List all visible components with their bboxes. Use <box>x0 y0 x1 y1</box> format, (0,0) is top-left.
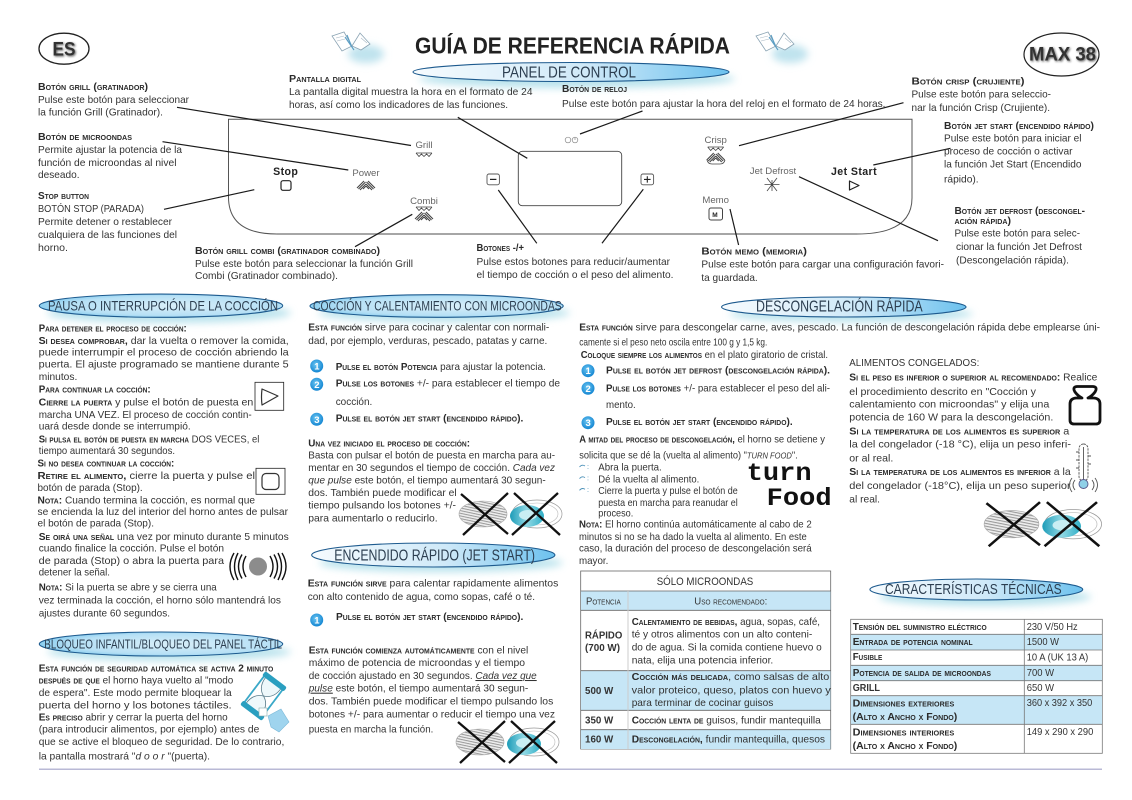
row: entrada: 1500 W <box>1027 637 1059 648</box>
text: pausa y continuación: cuando finalice la cocción. Pulse el botón <box>39 544 224 555</box>
row: fusible: Fusible <box>853 652 883 663</box>
text: función automática <box>308 645 555 736</box>
step 2 <box>582 382 830 411</box>
model badge: MAX 38 <box>1024 33 1099 76</box>
text: pausa y continuación: minutos. <box>39 372 77 383</box>
row: dimensiones exteriores: (Alto x Ancho x Fondo) <box>853 712 957 723</box>
button: Power <box>352 168 380 190</box>
heading: encendido: ENCENDIDO RÁPIDO (JET START) <box>334 546 535 565</box>
table: sólo microondas <box>581 571 832 749</box>
heading: bloqueo: BLOQUEO INFANTIL/BLOQUEO DEL PANEL TÁCTIL <box>44 636 282 652</box>
text: función automática: botones +/- para aumentar o reducir el tiempo una vez <box>309 709 555 720</box>
row: dimensiones interiores <box>853 727 1093 752</box>
step 2: 2 <box>314 380 319 391</box>
text: alimentos congelados: Si la temperatura de los alimentos es superior a <box>849 426 1070 437</box>
row: 160 W: 160 W <box>585 734 613 745</box>
row: 350 W: Cocción lenta de guisos, fundir mantequilla <box>632 715 821 726</box>
callout: pantalla digital <box>289 74 533 111</box>
text: pausa y continuación: puerta. El ajuste programado se mantiene durante 5 <box>39 360 289 371</box>
icon: weight <box>1070 386 1100 424</box>
text: pausa y continuación: Para continuar la cocción: <box>39 384 151 395</box>
text: pausa y continuación: Si pulsa el botón de puesta en marcha DOS VECES, el <box>39 434 259 445</box>
text: alimentos congelados <box>849 358 1098 506</box>
callout: botón de microondas: Botón de microondas <box>38 132 132 143</box>
step 2: Pulse los botones +/- para establecer el tiempo de <box>336 379 560 390</box>
button: Combi <box>410 196 438 221</box>
text: pausa y continuación: Cierre la puerta y pulse el botón de puesta en <box>39 398 254 409</box>
callout: botones -/+: Pulse estos botones para reducir/aumentar <box>476 257 671 268</box>
heading: características técnicas: CARACTERÍSTICAS TÉCNICAS <box>885 581 1062 598</box>
table: características técnicas <box>851 619 1102 753</box>
text: función automática: pulse este botón, el tiempo aumentará 30 segun- <box>308 684 528 695</box>
button: Memo: Memo <box>702 195 729 206</box>
button: Crisp <box>705 135 727 164</box>
text: una vez iniciado: para aumentarlo o reducirlo. <box>308 514 438 525</box>
heading: pausa: PAUSA O INTERRUPCIÓN DE LA COCCIÓN <box>48 298 278 314</box>
step 1: 1 <box>314 616 320 626</box>
row: entrada <box>853 637 1059 648</box>
panel: descongelación rápida <box>579 297 1102 567</box>
heading: bloqueo <box>39 632 291 661</box>
text: una vez iniciado: que pulse este botón, el tiempo aumentará 30 segun- <box>308 475 546 486</box>
text: una vez iniciado: Basta con pulsar el botón de puesta en marcha para au- <box>308 450 555 461</box>
row: dimensiones exteriores: Dimensiones exteriores <box>853 699 955 710</box>
button: Grill: Grill <box>415 140 433 151</box>
text: pausa y continuación: marcha UNA VEZ. El proceso de cocción contin- <box>39 410 252 421</box>
callout: botón de reloj: Botón de reloj <box>562 84 627 95</box>
text: pasos: Abra la puerta. <box>598 463 662 474</box>
callout: stop button <box>38 191 177 254</box>
row: grill: GRILL <box>853 683 881 694</box>
model badge: MAX 38: MAX 38 <box>1029 44 1096 66</box>
text: pausa y continuación: botón de parada (Stop). <box>38 483 143 494</box>
text: alimentos congelados: del congelador (-18°C), elija un peso superior <box>849 481 1071 492</box>
callout: botones -/+: Botones -/+ <box>476 243 524 254</box>
row: 500 W: 500 W <box>585 686 613 697</box>
button: Jet Defrost: Jet Defrost <box>750 166 797 177</box>
text: pausa y continuación: Para detener el proceso de cocción: <box>39 323 187 334</box>
text: pausa y continuación <box>38 323 289 619</box>
display text: turn food <box>747 459 832 513</box>
text: nota: minutos si no se ha dado la vuelta al alimento. En este <box>579 532 807 543</box>
table header: Potencia <box>586 596 621 607</box>
icon: open book right <box>756 32 808 63</box>
text: bloqueo: de espera". Este modo permite bloquear la <box>39 688 232 699</box>
button: Stop <box>273 166 298 190</box>
callout: botón de reloj <box>562 84 886 110</box>
text: alimentos congelados: la del congelador (-18 °C), elija un peso inferi- <box>849 440 1071 451</box>
callout: botón memo: ta guardada. <box>701 273 758 284</box>
button: Stop: Stop <box>273 166 298 178</box>
button: Memo: M <box>712 212 718 219</box>
button: Grill <box>415 140 433 156</box>
table header <box>586 596 767 607</box>
row: tensión <box>853 622 1078 633</box>
text: pausa y continuación: vez terminada la cocción, el horno sólo mantendrá los <box>39 596 281 607</box>
icon: bullets <box>580 465 588 492</box>
row: 500 W <box>585 672 832 709</box>
row: 500 W: valor proteico, queso, platos con huevo y <box>632 685 832 696</box>
row: rápido: do de agua. Si la comida contiene huevo o <box>632 643 822 654</box>
callout: botón crisp <box>912 77 1051 114</box>
callout: botón grill combi <box>195 246 413 282</box>
text: intro descongelación <box>579 323 1100 361</box>
digital display <box>518 151 622 206</box>
text: una vez iniciado: dos. También puede modificar el <box>308 488 457 499</box>
table title: SÓLO MICROONDAS <box>657 575 753 588</box>
row: rápido <box>585 617 822 666</box>
callout: botón grill combi: Combi (Gratinador combinado). <box>195 271 338 282</box>
text: pausa y continuación: ajustes durante 60 segundos. <box>39 608 170 619</box>
icon: open book left <box>332 32 384 63</box>
callout: botón grill: Botón grill (gratinador) <box>38 82 148 93</box>
row: rápido: Calentamiento de bebidas, agua, sopas, café, <box>632 617 820 628</box>
text: pausa y continuación: Si no desea continuar la cocción: <box>38 459 174 470</box>
text: intro descongelación: camente si el peso neto oscila entre 100 g y 1,5 kg. <box>579 338 767 349</box>
text: alimentos congelados: Si el peso es inferior o superior al recomendado: Realice <box>849 373 1098 384</box>
text: intro cocción: dad, por ejemplo, verduras, pescado, patatas y carne. <box>308 336 547 347</box>
icon: stop button box <box>256 468 285 494</box>
heading: descongelación: DESCONGELACIÓN RÁPIDA <box>756 299 923 316</box>
text: función automática: máximo de potencia de microondas y el tiempo <box>309 658 525 669</box>
text: mitad del proceso <box>579 435 826 461</box>
icon: sound signal <box>230 553 286 580</box>
button: Jet Defrost <box>750 166 797 191</box>
callout: botón crisp: Botón crisp (crujiente) <box>912 77 1024 88</box>
row: dimensiones exteriores: 360 x 392 x 350 <box>1027 698 1092 709</box>
row: dimensiones interiores: (Alto x Ancho x Fondo) <box>853 741 957 752</box>
step 1: Pulse el botón jet start (encendido rápido). <box>336 612 523 623</box>
heading: panel de control: PANEL DE CONTROL <box>502 64 636 82</box>
text: bloqueo: Es preciso abrir y cerrar la puerta del horno <box>39 712 228 723</box>
text: intro descongelación: Coloque siempre los alimentos en el plato giratorio de cristal. <box>581 350 828 361</box>
control panel outline with buttons <box>228 119 912 234</box>
text: intro descongelación: Esta función sirve para descongelar carne, aves, pescado. La función de descongelación rápida debe emplearse úni- <box>579 323 1100 334</box>
text: pasos: puesta en marcha para reanudar el <box>598 498 738 509</box>
text: alimentos congelados: al real. <box>849 495 880 506</box>
panel: encendido rápido <box>308 543 563 763</box>
heading: encendido <box>312 543 563 572</box>
text: bloqueo <box>39 664 284 762</box>
step 2: mento. <box>606 400 636 411</box>
heading: características técnicas <box>870 579 1091 606</box>
button: Power: Power <box>352 168 380 179</box>
step 3: 3 <box>586 418 591 429</box>
text: alimentos congelados: or al real. <box>849 454 893 465</box>
row: tensión: Tensión del suministro eléctrico <box>853 622 987 633</box>
callout: botón jet defrost <box>954 206 1086 267</box>
step 1: 1 <box>586 366 592 377</box>
callout: botón grill <box>38 82 190 118</box>
callout: stop button: cualquiera de las funciones del <box>38 230 177 241</box>
panel: cocción y calentamiento <box>308 295 570 535</box>
step 1: Pulse el botón jet defrost (descongelación rápida). <box>606 365 830 376</box>
callout: stop button: BOTÓN STOP (PARADA) <box>38 202 144 215</box>
text: alimentos congelados: Si la temperatura de los alimentos es inferior a la <box>849 467 1071 478</box>
row: rápido: (700 W) <box>585 643 620 654</box>
callout: botón memo: Botón memo (memoria) <box>701 247 807 258</box>
callout: botón de microondas: deseado. <box>38 170 80 181</box>
text: función automática: Esta función comienza automáticamente con el nivel <box>309 645 528 656</box>
callout: botón jet start: proceso de cocción o activar <box>944 147 1073 158</box>
button: plus <box>641 174 654 185</box>
heading: cocción: COCCIÓN Y CALENTAMIENTO CON MICROONDAS <box>313 299 562 314</box>
button: Combi: Combi <box>410 196 438 207</box>
step 2: 2 <box>586 384 591 395</box>
text: una vez iniciado: mentar en 30 segundos el tiempo de cocción. Cada vez <box>308 463 556 474</box>
text: pausa y continuación: Nota: Si la puerta se abre y se cierra una <box>39 583 217 594</box>
text: bloqueo: Esta función de seguridad automática se activa 2 minuto <box>39 664 274 675</box>
callout: botón grill: la función Grill (Gratinador). <box>38 108 163 118</box>
step 1: Pulse el botón Potencia para ajustar la potencia. <box>336 362 546 373</box>
text: intro encendido <box>308 579 558 603</box>
icon: crossed-out dishes <box>456 721 559 763</box>
display text: turn food: turn <box>747 459 812 488</box>
text: mitad del proceso: solicita que se dé la (vuelta al alimento) "TURN FOOD". <box>579 450 798 461</box>
panel: pausa o interrupción <box>38 294 291 619</box>
text: alimentos congelados: potencia de 160 W para la descongelación. <box>849 413 1053 424</box>
table header: Uso recomendado: <box>694 596 767 607</box>
step 2: Pulse los botones +/- para establecer el peso del ali- <box>606 384 830 395</box>
text: pausa y continuación: Nota: Cuando termina la cocción, es normal que <box>38 495 255 506</box>
callout: stop button: Permite detener o restablecer <box>38 217 173 228</box>
heading: panel de control <box>413 62 735 88</box>
heading: pausa <box>39 294 291 323</box>
text: una vez iniciado <box>308 439 556 525</box>
callout: botones -/+ <box>476 243 674 281</box>
button: Jet Start: Jet Start <box>831 166 877 178</box>
button: minus <box>487 174 499 185</box>
step 1: 1 <box>314 362 320 372</box>
text: función automática: dos. También puede modificar el tiempo pulsando los <box>309 696 553 707</box>
callout: stop button: Stop button <box>38 191 89 202</box>
callout: stop button: horno. <box>38 243 68 254</box>
text: nota: Nota: El horno continúa automáticamente al cabo de 2 <box>579 520 812 531</box>
callout: pantalla digital: Pantalla digital <box>289 74 362 85</box>
button: Memo <box>702 195 729 220</box>
step 3: 3 <box>314 415 319 426</box>
callout: botón jet start: rápido). <box>944 175 979 186</box>
text: función automática: puesta en marcha la función. <box>309 725 433 736</box>
callout: pantalla digital: La pantalla digital muestra la hora en el formato de 24 <box>289 87 533 98</box>
row: 500 W: para terminar de cocinar guisos <box>632 698 773 709</box>
text: pausa y continuación: Se oirá una señal una vez por minuto durante 5 minutos <box>39 532 289 543</box>
icon: hourglass <box>240 671 289 732</box>
callout: botón jet start <box>944 121 1094 186</box>
row: grill: 650 W <box>1027 683 1054 694</box>
row: fusible: 10 A (UK 13 A) <box>1027 653 1088 664</box>
text: pausa y continuación: puede interrumpir el proceso de cocción abriendo la <box>39 348 289 359</box>
text: intro cocción <box>308 323 549 347</box>
icon: clock <box>565 137 578 143</box>
text: pasos: Cierre la puerta y pulse el botón de <box>598 486 738 497</box>
text: nota: caso, la duración del proceso de descongelación será <box>579 544 812 555</box>
text: una vez iniciado: tiempo pulsando los botones +/- <box>308 500 456 511</box>
row: dimensiones interiores: 149 x 290 x 290 <box>1027 727 1093 738</box>
button: Crisp: Crisp <box>705 135 727 146</box>
text: alimentos congelados: el procedimiento descrito en "Cocción y <box>849 387 1037 398</box>
callout: pantalla digital: horas, así como los indicadores de las funciones. <box>289 100 508 111</box>
row: entrada: Entrada de potencia nominal <box>853 637 973 648</box>
row: potencia de salida: 700 W <box>1027 668 1054 679</box>
text: pasos: proceso. <box>598 509 633 520</box>
text: alimentos congelados: calentamiento con microondas" y elija una <box>849 399 1050 410</box>
row: rápido: nata, elija una potencia inferior. <box>632 655 773 666</box>
icon: crossed-out dishes <box>459 493 562 535</box>
text: mitad del proceso: A mitad del proceso de descongelación, el horno se detiene y <box>579 435 826 446</box>
text: nota: mayor. <box>579 556 608 567</box>
row: potencia de salida: Potencia de salida de microondas <box>853 668 991 679</box>
text: pausa y continuación: uará desde donde se interrumpió. <box>39 422 191 433</box>
text: bloqueo: después de que el horno haya vuelto al "modo <box>39 675 234 686</box>
callout: botón de microondas: Permite ajustar la potencia de la <box>38 145 182 156</box>
text: bloqueo: que se active el bloqueo de seguridad. De lo contrario, <box>39 737 284 748</box>
callout: botón grill combi: Botón grill combi (gratinador combinado) <box>195 246 380 257</box>
step 1 <box>310 612 523 626</box>
callout: botón memo: Pulse este botón para cargar una configuración favori- <box>701 260 944 271</box>
text: pausa y continuación: de parada (Stop) o abra la puerta para <box>39 556 224 567</box>
text: intro encendido: Esta función sirve para calentar rapidamente alimentos <box>308 579 558 590</box>
callout: botón grill: Pulse este botón para seleccionar <box>38 95 190 106</box>
text: intro encendido: con alto contenido de agua, como sopas, café o té. <box>308 592 535 603</box>
callout: botón memo <box>701 247 944 284</box>
text: pasos: Dé la vuelta al alimento. <box>598 474 699 485</box>
row: grill <box>853 683 1054 694</box>
callout: botón de reloj: Pulse este botón para ajustar la hora del reloj en el formato de 24 horas. <box>562 99 886 110</box>
row: tensión: 230 V/50 Hz <box>1027 622 1078 633</box>
text: pausa y continuación: tiempo aumentará 30 segundos. <box>39 446 175 457</box>
text: pausa y continuación: detener la señal. <box>39 568 110 579</box>
callout: botón jet start: la función Jet Start (Encendido <box>944 160 1082 171</box>
title: GUÍA DE REFERENCIA RÁPIDA <box>415 32 730 58</box>
text: alimentos congelados: ALIMENTOS CONGELADOS: <box>849 358 979 369</box>
callout: botón jet start: Botón jet start (encendido rápido) <box>944 121 1094 132</box>
step 3: Pulse el botón jet start (encendido rápido). <box>606 417 793 428</box>
callout: botón jet defrost: ación rápida) <box>954 216 1011 227</box>
text: pausa y continuación: Retire el alimento, cierre la puerta y pulse el <box>38 471 255 482</box>
callout: botón jet defrost: (Descongelación rápida). <box>956 256 1069 267</box>
language badge: ES <box>39 33 89 64</box>
text: bloqueo: (para introducir alimentos, por ejemplo) antes de <box>39 725 260 736</box>
step 3: Pulse el botón jet start (encendido rápido). <box>336 414 523 425</box>
text: función automática: de cocción ajustado en 30 segundos. Cada vez que <box>309 671 537 682</box>
row: fusible <box>853 652 1088 664</box>
leader lines <box>162 103 950 247</box>
row: 350 W: 350 W <box>585 715 613 726</box>
text: bloqueo: puerta del horno y los botones táctiles. <box>39 700 232 711</box>
text: intro cocción: Esta función sirve para cocinar y calentar con normali- <box>308 323 549 334</box>
text: nota <box>579 520 812 567</box>
callout: botones -/+: el tiempo de cocción o el peso del alimento. <box>476 270 674 281</box>
language badge: ES: ES <box>52 40 76 60</box>
callout: botón crisp: Pulse este botón para seleccio- <box>912 90 1051 101</box>
row: dimensiones interiores: Dimensiones interiores <box>853 728 955 739</box>
callout: botón jet defrost: cionar la función Jet Defrost <box>956 242 1082 253</box>
button: Jet Start <box>831 166 877 190</box>
callout: botón grill combi: Pulse este botón para seleccionar la función Grill <box>195 259 413 270</box>
icon: crossed-out dishes <box>984 502 1102 546</box>
row: 500 W: Cocción más delicada , como salsas de alto <box>632 672 830 683</box>
panel: bloqueo infantil <box>39 632 291 762</box>
callout: botón crisp: nar la función Crisp (Crujiente). <box>912 103 1050 114</box>
row: rápido: té y otros alimentos con un alto conteni- <box>632 630 812 641</box>
callout: botón jet start: Pulse este botón para iniciar el <box>944 134 1082 145</box>
callout: botón jet defrost: Botón jet defrost (descongel- <box>954 206 1086 217</box>
text: una vez iniciado: Una vez iniciado el proceso de cocción: <box>308 439 470 450</box>
text: pasos <box>598 463 738 520</box>
icon: start button box <box>255 382 284 410</box>
display text: turn food: Food <box>767 484 832 513</box>
text: pausa y continuación: el botón de parada (Stop). <box>38 519 154 530</box>
callout: botón de microondas <box>38 132 182 181</box>
callout: botón de microondas: función de microondas al nivel <box>38 158 176 169</box>
row: 160 W: Descongelación, fundir mantequilla, quesos <box>632 734 825 745</box>
text: pausa y continuación: se encienda la luz del interior del horno antes de pulsar <box>38 507 289 518</box>
text: pausa y continuación: Si desea comprobar, dar la vuelta o remover la comida, <box>39 336 289 347</box>
step 2: cocción. <box>336 397 372 408</box>
heading: descongelación <box>722 297 973 322</box>
icon: thermometer <box>1070 444 1098 492</box>
step 2 <box>310 378 560 408</box>
row: rápido: RÁPIDO <box>585 628 622 641</box>
row: dimensiones exteriores <box>853 698 1092 723</box>
text: bloqueo: la pantalla mostrará "d o o r "(puerta). <box>39 751 210 762</box>
callout: botón jet defrost: Pulse este botón para selec- <box>954 229 1080 240</box>
heading: cocción <box>310 295 570 322</box>
